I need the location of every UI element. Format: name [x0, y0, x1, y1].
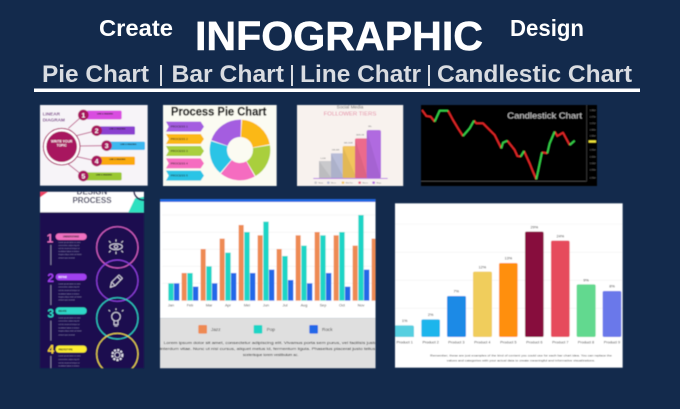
month labels: Oct — [339, 304, 346, 308]
product labels — [396, 341, 620, 345]
panel: follower tiers chart: FOLLOWER TIERS — [324, 111, 377, 117]
panel: linear diagram: LINE & HEADING — [109, 128, 126, 131]
footnote — [430, 354, 613, 362]
panel: candlestick chart — [421, 105, 597, 186]
panel: linear diagram: 5 — [81, 173, 85, 180]
step 1: 1 — [47, 232, 54, 246]
heading: Create INFOGRAPHIC Design: INFOGRAPHIC — [195, 13, 483, 59]
month labels: Jul — [283, 304, 288, 308]
panel: linear diagram: LINE & HEADING — [96, 174, 113, 177]
heading: linear diagram: LINEAR — [43, 111, 60, 116]
panel: product bar chart — [395, 203, 623, 368]
icon: eye — [109, 239, 123, 254]
legend — [314, 181, 382, 184]
price axis: 1.3750 — [590, 116, 597, 118]
legend: Pop — [267, 327, 275, 332]
icon: pencil — [110, 275, 122, 287]
step 2: veniam quis nostrud — [58, 299, 75, 302]
value labels: 2% — [428, 313, 434, 317]
step 4 — [48, 333, 138, 375]
value labels: 1% — [402, 319, 408, 323]
price axis: 1.3400 — [590, 163, 597, 165]
product labels: Product 7 — [552, 341, 569, 345]
price axis: 1.3300 — [590, 178, 597, 180]
rock bars — [174, 270, 369, 301]
value labels: 29% — [530, 226, 539, 230]
heading: linear diagram: DIAGRAM — [43, 117, 65, 122]
heading: process pie chart: Process Pie Chart — [171, 106, 266, 119]
step 2: 2 — [47, 271, 54, 285]
month labels: Feb — [187, 304, 193, 308]
step 4: consectetur adipiscing elit — [58, 358, 80, 361]
jazz bars — [182, 225, 376, 301]
step 1: incididunt labore et dolore — [58, 250, 79, 253]
step 3: 3 — [47, 306, 54, 320]
step 4: sed do eiusmod tempor ut — [58, 361, 80, 364]
legend: Jazz — [211, 327, 221, 332]
price axis — [590, 110, 597, 180]
heading: Create INFOGRAPHIC Design: Create — [99, 15, 173, 41]
panel: process pie chart: PROCESS 4 — [171, 161, 188, 165]
step 3: incididunt labore et dolore — [58, 326, 79, 329]
product labels: Product 5 — [500, 341, 517, 345]
heading: Create INFOGRAPHIC Design: Design — [510, 15, 584, 41]
panel: linear diagram: 3 — [105, 143, 109, 150]
price axis: 1.3600 — [590, 136, 597, 138]
product labels: Product 1 — [396, 341, 413, 345]
footnote: values and categories with your actual data to create meaningful and informative visualizations. — [447, 358, 596, 362]
panel: follower tiers chart: 10K-50K — [332, 149, 340, 151]
legend: Micro — [331, 181, 337, 184]
step 4: PROTOTYPE — [58, 349, 73, 351]
numbered nodes — [78, 110, 112, 181]
legend: Rock — [322, 327, 333, 332]
panel: follower tiers chart: 50K-100K — [344, 143, 353, 145]
heading: candlestick chart: Candlestick Chart — [507, 111, 583, 121]
panel: follower tiers chart — [297, 104, 403, 186]
value labels: 8% — [609, 285, 615, 289]
step 3: Lorem ipsum dolor sit amet — [58, 316, 81, 319]
step 1: sed do eiusmod tempor ut — [58, 247, 80, 250]
step 3: IDEATE — [58, 310, 67, 313]
month labels: Sep — [320, 304, 326, 308]
month labels — [168, 304, 364, 308]
product labels: Product 8 — [578, 341, 594, 345]
step 3 — [47, 298, 138, 341]
value labels: 7% — [454, 290, 460, 294]
price axis: 1.3700 — [590, 123, 597, 125]
subtitle: chart types: Candlestic Chart — [437, 61, 632, 88]
panel: process pie chart: PROCESS 5 — [171, 174, 188, 178]
step 1: UNDERSTAND — [63, 236, 79, 239]
price axis: 1.3500 — [590, 150, 597, 152]
icon: gear — [112, 350, 122, 360]
price line: falling segments — [422, 110, 570, 179]
icon: light bulb — [109, 308, 123, 326]
step 1 — [47, 227, 138, 268]
panel: design process — [39, 190, 145, 370]
heading: Create INFOGRAPHIC Design — [99, 13, 584, 59]
price axis: 1.3650 — [590, 129, 597, 131]
step 1: Lorem ipsum dolor sit amet — [58, 241, 81, 244]
value labels: 13% — [504, 257, 513, 261]
step 2: consectetur adipiscing elit — [58, 286, 80, 289]
panel: design process: PROCESS — [72, 196, 112, 205]
caption — [160, 341, 377, 357]
heading underline — [34, 88, 640, 92]
panel: grouped bar chart — [160, 199, 377, 368]
panel: follower tiers chart: 1-10K — [320, 158, 326, 160]
step 2: Lorem ipsum dolor sit amet — [58, 282, 81, 285]
month labels: Aug — [301, 304, 307, 308]
panel: process pie chart — [163, 105, 277, 186]
panel: linear diagram — [40, 105, 148, 186]
value labels: 12% — [478, 265, 487, 269]
panel: linear diagram: 1 — [81, 112, 85, 119]
step 3: veniam quis nostrud — [58, 334, 75, 337]
panel: follower tiers chart: 1M+ — [368, 126, 373, 128]
label bars — [85, 111, 145, 180]
panel: linear diagram: 2 — [95, 128, 99, 135]
heading: design process: DESIGN — [77, 188, 108, 197]
legend: Mega — [376, 182, 382, 184]
step 3: sed do eiusmod tempor ut — [58, 323, 80, 326]
process arrows — [166, 122, 204, 181]
step 2: sed do eiusmod tempor ut — [58, 289, 80, 292]
month labels: Jan — [168, 304, 174, 308]
value labels: 24% — [556, 234, 565, 238]
step 2: incididunt labore et dolore — [58, 292, 79, 295]
step 1: magna aliqua enim ad minim — [58, 254, 82, 256]
step 2: DEFINE — [58, 277, 67, 279]
product labels: Product 3 — [448, 341, 465, 345]
caption: Lorem ipsum dolor sit amet, consectetur adipiscing elit. Vivamus porta sem purus, vel facilisis justo — [164, 341, 377, 345]
panel: linear diagram: LINE & HEADING — [97, 112, 114, 115]
step 3: magna aliqua enim ad minim — [58, 331, 82, 333]
product labels: Product 4 — [474, 341, 491, 345]
product labels: Product 6 — [526, 341, 543, 345]
step 4: 4 — [48, 343, 55, 357]
panel: process pie chart: PROCESS 2 — [171, 137, 188, 141]
central topic circle — [43, 128, 80, 165]
step 2 — [47, 260, 138, 305]
subtitle: chart types — [42, 61, 632, 88]
step 2: magna aliqua enim ad minim — [58, 297, 82, 299]
caption: interdum vitae. Nunc ut nisl cursus, aliquet metus id, fermentum ligula. Phasellus placerat justo tellus, — [160, 347, 377, 351]
product labels: Product 9 — [604, 341, 620, 345]
value labels — [402, 226, 615, 323]
price axis: 1.3350 — [590, 170, 597, 172]
step 1: consectetur adipiscing elit — [58, 244, 80, 247]
value labels: 9% — [583, 278, 589, 282]
donut chart — [209, 119, 271, 181]
legend: Macro — [362, 181, 369, 184]
header band — [39, 190, 145, 214]
step 1: veniam quis nostrud — [58, 257, 75, 260]
central topic circle: TOPIC — [57, 143, 67, 147]
price axis: 1.3450 — [590, 156, 597, 158]
subtitle: chart types: Pie Chart — [42, 61, 149, 88]
step 4: incididunt labore et dolore — [58, 365, 79, 368]
subtitle: chart types: Bar Chart — [172, 61, 284, 88]
panel: linear diagram: 4 — [95, 158, 99, 165]
panel: follower tiers chart: 100K-1M — [356, 134, 364, 136]
central topic circle: WRITE YOUR — [51, 140, 72, 144]
heading: follower tiers: Social Media — [337, 104, 364, 109]
step 4: Lorem ipsum dolor sit amet — [58, 355, 81, 358]
product labels: Product 2 — [422, 341, 439, 345]
price line: rising segments — [435, 111, 575, 179]
panel: process pie chart: PROCESS 1 — [171, 125, 188, 129]
legend — [198, 325, 333, 334]
panel: linear diagram: LINE & HEADING — [120, 143, 137, 146]
pop bars — [168, 215, 364, 301]
month labels: Mar — [206, 304, 213, 308]
price axis: 1.3800 — [590, 110, 597, 112]
bars — [319, 130, 381, 178]
caption: scelerisque lorem vestibulum ac. — [243, 353, 298, 357]
month labels: Mei — [244, 304, 250, 308]
subtitle: chart types: Line Chatr — [300, 61, 421, 88]
month labels: Jun — [263, 304, 269, 308]
legend: Mid-Tier — [346, 181, 353, 184]
month labels: Nov — [358, 304, 364, 308]
month labels: Apr — [225, 304, 232, 308]
panel: process pie chart: PROCESS 3 — [171, 149, 188, 153]
panel: linear diagram: LINE & HEADING — [109, 158, 126, 161]
step 3: consectetur adipiscing elit — [58, 320, 80, 323]
footnote: Remember, these are just examples of the kind of content you could use for each bar chart idea. You can replace the — [430, 354, 613, 358]
legend: Nano — [318, 182, 324, 184]
bars — [395, 232, 621, 337]
